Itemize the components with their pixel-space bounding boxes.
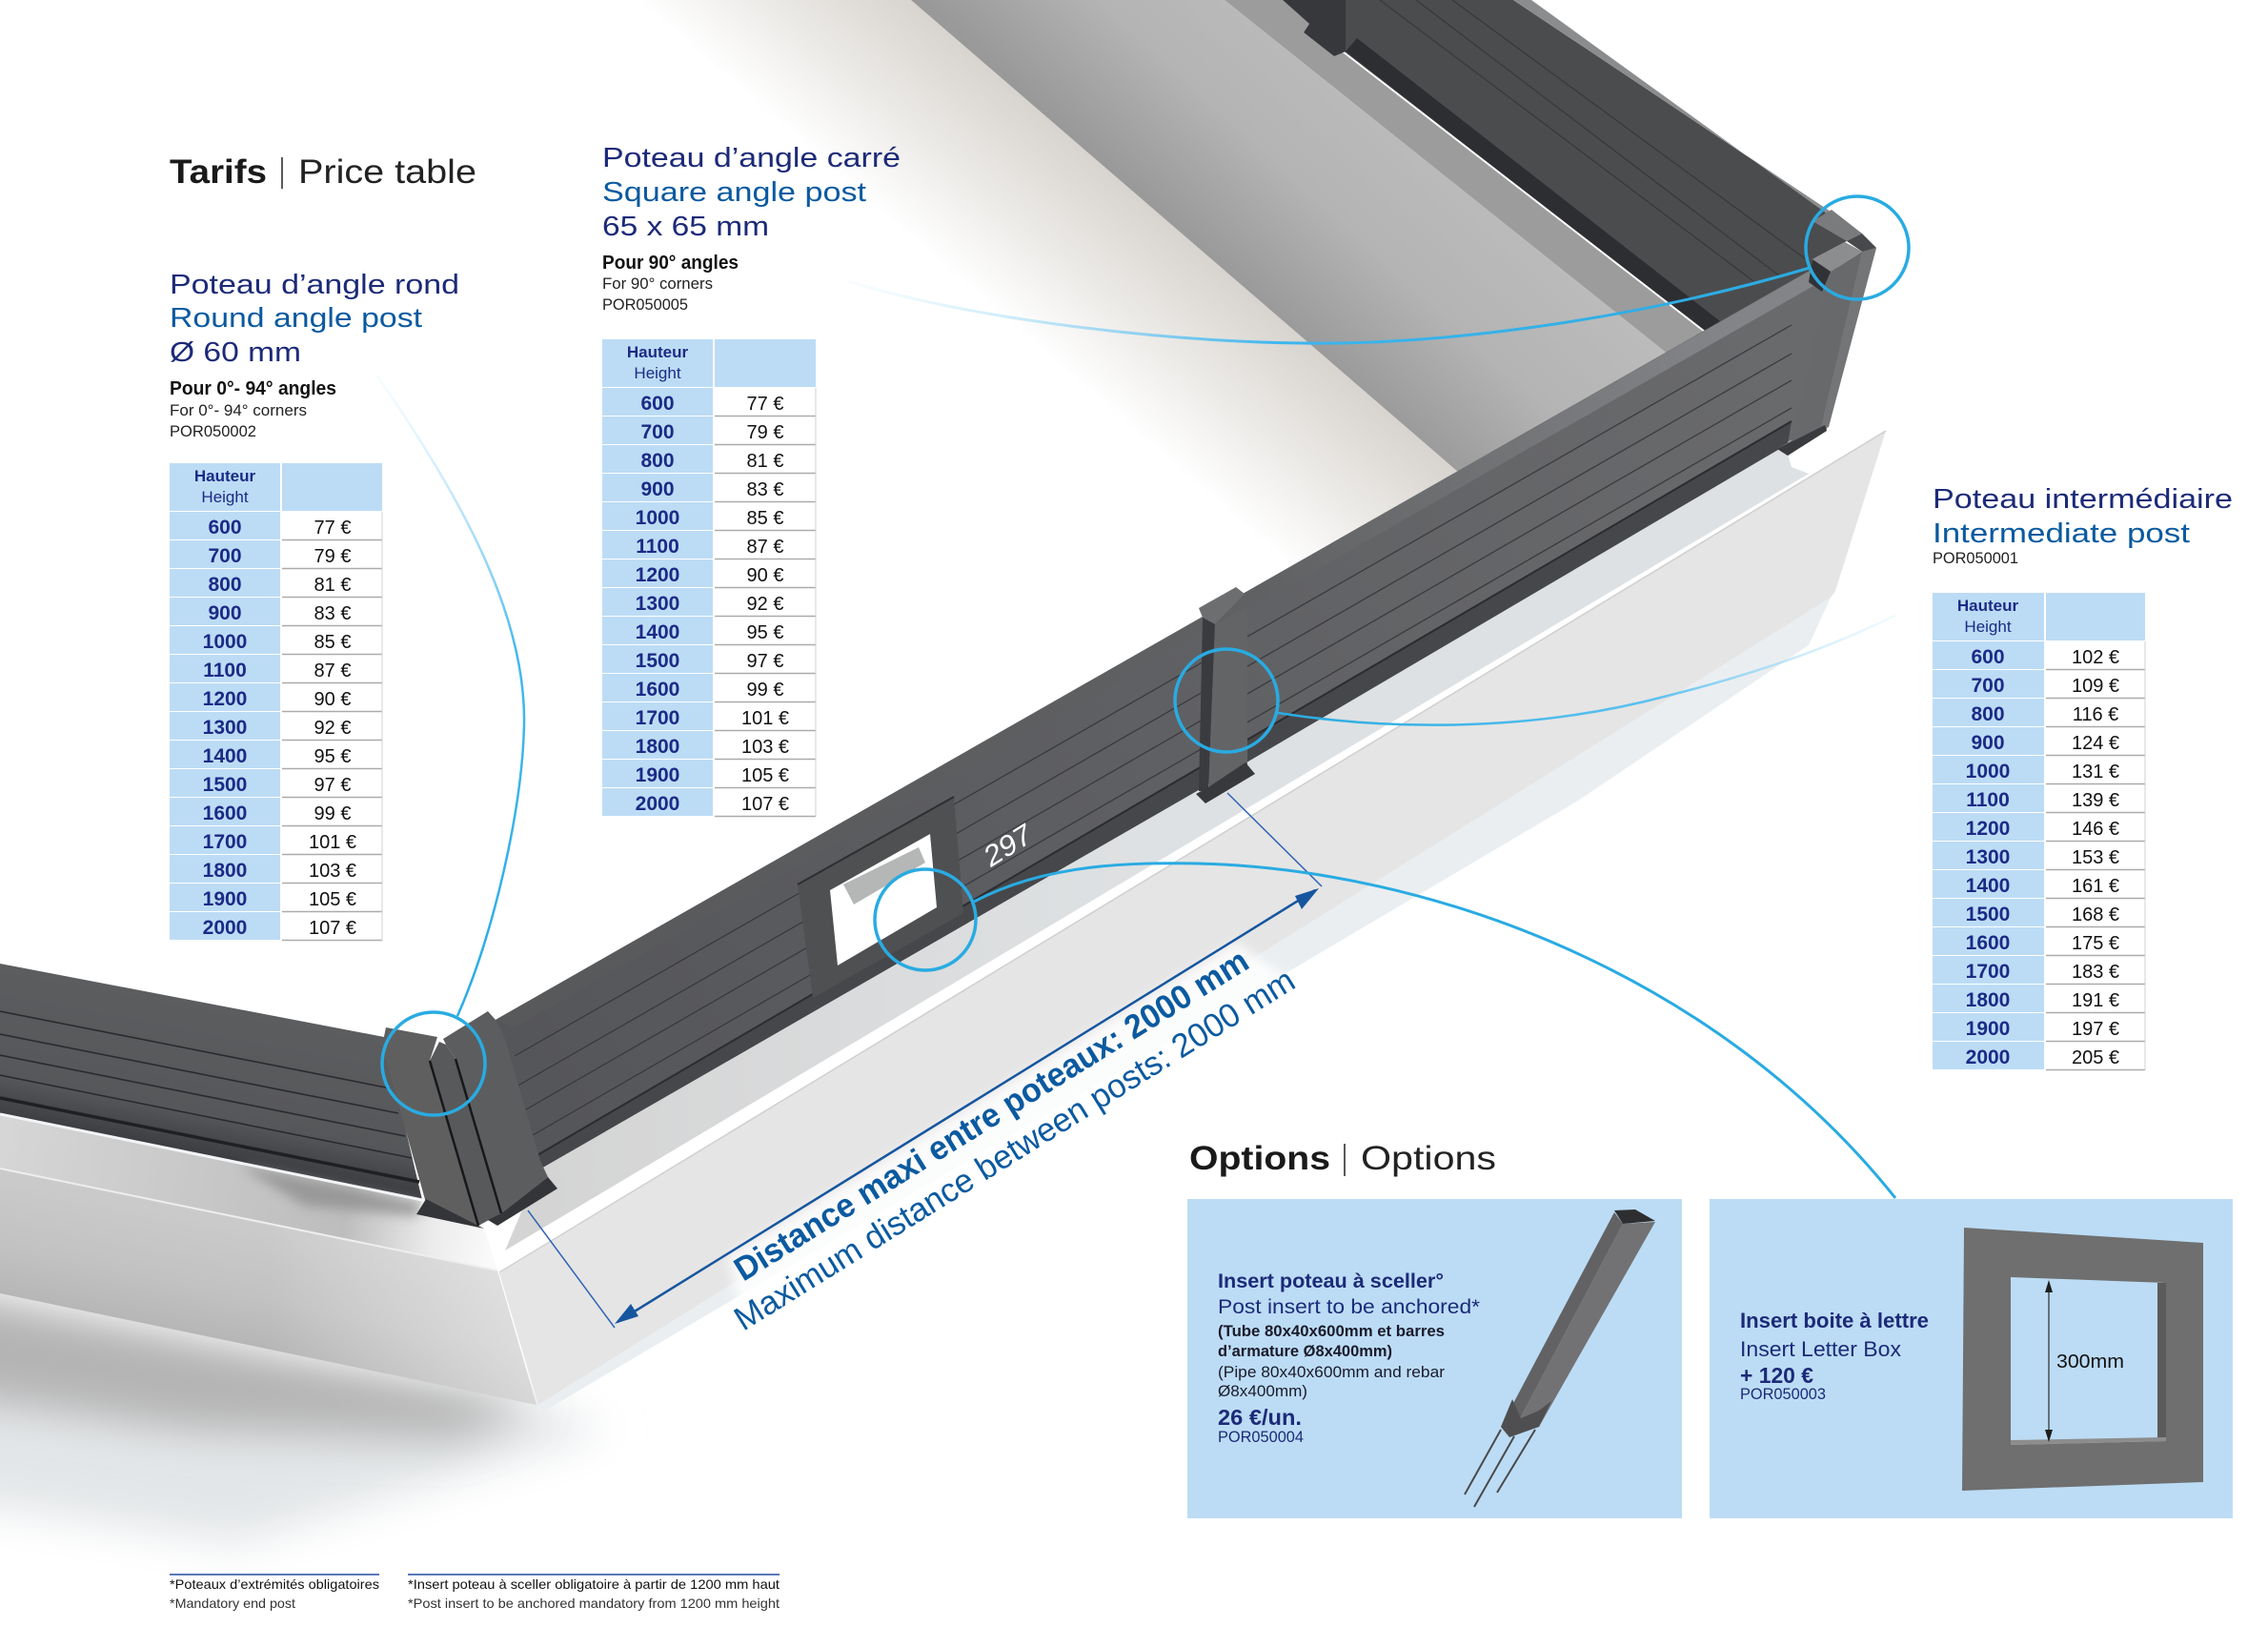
footnote: end post	[170, 1575, 379, 1611]
table: square angle post prices: 600	[640, 393, 675, 415]
dimension label: Maximum distance between posts: 2000 mm	[728, 962, 1302, 1338]
table: intermediate post prices: 197 €	[2072, 1019, 2119, 1040]
table: round angle post prices: 79 €	[314, 546, 351, 567]
table: round angle post prices: 77 €	[314, 518, 351, 539]
table: round angle post prices: 1300	[203, 717, 247, 739]
table: square angle post prices: 1100	[636, 536, 679, 558]
table: square angle post prices: 700	[640, 421, 675, 443]
panel: letter box insert option	[1710, 1199, 2233, 1518]
table: intermediate post prices: 191 €	[2072, 990, 2119, 1011]
table: round angle post prices: 900	[208, 602, 242, 624]
icon: letter box frame	[1962, 1228, 2203, 1491]
icon: anchored post insert	[1465, 1209, 1655, 1507]
table: square angle post prices: 900	[640, 478, 675, 500]
post insert text: Insert poteau à sceller°	[1218, 1270, 1444, 1292]
table header: Hauteur	[627, 343, 688, 361]
table: round angle post prices: 1700	[203, 831, 247, 853]
heading: Options | Options: Options	[1189, 1140, 1330, 1177]
post insert text: (Tube 80x40x600mm et barres	[1218, 1322, 1445, 1340]
table: round angle post prices: 1900	[203, 888, 247, 910]
table: intermediate post prices: 131 €	[2072, 762, 2119, 783]
table: square angle post prices: 1900	[636, 764, 679, 786]
table: round angle post prices: 92 €	[314, 718, 351, 739]
table: intermediate post prices: 168 €	[2072, 904, 2119, 925]
table: round angle post prices: 97 €	[314, 775, 351, 796]
table: round angle post prices: 87 €	[314, 661, 351, 681]
post insert text: Post insert to be anchored*	[1218, 1296, 1480, 1318]
table: square angle post prices: 83 €	[747, 479, 783, 500]
table: intermediate post prices: 161 €	[2072, 876, 2119, 897]
table: intermediate post prices: 102 €	[2072, 647, 2119, 668]
table: intermediate post prices: 116 €	[2073, 704, 2118, 725]
table: intermediate post prices: 205 €	[2072, 1047, 2119, 1068]
table: round angle post prices: 1100	[203, 660, 247, 681]
far post	[1283, 0, 1346, 56]
table: round angle post prices: 105 €	[309, 889, 356, 910]
table: square angle post prices: 1400	[636, 621, 679, 643]
heading: intermediate post: Poteau intermédiaire	[1933, 484, 2233, 515]
table: square angle post prices: 2000	[636, 793, 679, 815]
left wall	[0, 964, 422, 1200]
table: square angle post prices: 77 €	[747, 394, 783, 415]
table: square angle post prices: 101 €	[741, 708, 789, 729]
table: square angle post prices: 90 €	[747, 565, 783, 586]
heading: round angle post: Round angle post	[170, 303, 422, 334]
footnote: end post: *Poteaux d’extrémités obligatoires	[170, 1576, 379, 1592]
footnote: anchored insert: *Insert poteau à sceller obligatoire à partir de 1200 mm haut	[408, 1576, 780, 1592]
front wall	[496, 254, 1839, 1169]
table: square angle post prices: 1600	[636, 679, 679, 701]
table: square angle post prices: 95 €	[747, 622, 783, 643]
table: round angle post prices: 1800	[203, 860, 247, 882]
table header: Height	[634, 364, 681, 382]
heading: Options | Options	[1189, 1140, 1496, 1177]
table: square angle post prices: 1800	[636, 736, 679, 758]
table: intermediate post prices: 1300	[1966, 846, 2010, 868]
heading: square angle post: Square angle post	[602, 177, 866, 208]
table header: Height	[201, 488, 249, 506]
title: Tarifs | Price table	[170, 153, 476, 191]
table: intermediate post prices: 183 €	[2072, 962, 2119, 983]
heading: intermediate post: Intermediate post	[1933, 518, 2190, 549]
table: square angle post prices: 1000	[636, 507, 679, 529]
table: round angle post prices: 107 €	[309, 918, 356, 939]
letter box on wall	[798, 797, 963, 998]
heading: round angle post: Pour 0°- 94° angles	[170, 378, 336, 399]
heading: square angle post: Pour 90° angles	[602, 253, 739, 274]
table: round angle post prices: 85 €	[314, 632, 351, 653]
title: Tarifs | Price table: Tarifs	[170, 153, 267, 191]
post insert text: d’armature Ø8x400mm)	[1218, 1342, 1392, 1360]
table header: Hauteur	[1957, 597, 2018, 615]
scene: interior floor	[572, 0, 1705, 762]
letter box text: Insert boite à lettre	[1740, 1309, 1929, 1332]
heading: square angle post	[602, 143, 901, 314]
post insert text: 26 €/un.	[1218, 1405, 1302, 1430]
intermediate post	[1196, 587, 1255, 803]
table: intermediate post prices: 1200	[1966, 818, 2010, 840]
callout: intermediate post	[1175, 615, 1896, 752]
table: square angle post prices: 103 €	[741, 737, 789, 758]
table: square angle post prices: 87 €	[747, 537, 783, 558]
table: intermediate post prices: 139 €	[2072, 790, 2119, 811]
table: round angle post prices: 1200	[203, 688, 247, 710]
callout: square angle post	[848, 196, 1909, 343]
table: intermediate post prices: 900	[1971, 732, 2005, 754]
table: intermediate post prices: 600	[1971, 646, 2005, 668]
footnote: end post: *Mandatory end post	[170, 1596, 295, 1611]
heading: intermediate post: POR050001	[1933, 549, 2018, 567]
table: round angle post prices: 1400	[203, 745, 247, 767]
table: intermediate post prices: 1500	[1966, 904, 2010, 925]
table: square angle post prices: 99 €	[747, 680, 783, 701]
table: square angle post prices: 92 €	[747, 594, 783, 615]
shadow below plinth	[0, 1268, 610, 1544]
table: square angle post prices: 85 €	[747, 508, 783, 529]
heading: square angle post: For 90° corners	[602, 274, 713, 293]
dimension label: Distance maxi entre poteaux: 2000 mm	[728, 942, 1255, 1289]
heading: round angle post: Ø 60 mm	[170, 337, 301, 368]
house number 297: 297	[977, 819, 1040, 874]
table: round angle post prices: 101 €	[309, 832, 356, 853]
heading: square angle post: 65 x 65 mm	[602, 212, 769, 242]
table: intermediate post prices: 153 €	[2072, 847, 2119, 868]
post insert text	[1218, 1270, 1480, 1446]
post insert text: POR050004	[1218, 1428, 1304, 1446]
table: intermediate post prices: 109 €	[2072, 676, 2119, 697]
table: square angle post prices: 105 €	[741, 765, 789, 786]
table: intermediate post prices	[1933, 593, 2145, 1070]
table header	[1933, 593, 2145, 640]
left corner post	[382, 1011, 557, 1229]
table: round angle post prices: 700	[208, 545, 242, 567]
heading: Options | Options: Options	[1361, 1140, 1496, 1177]
table: square angle post prices: 1500	[636, 650, 679, 672]
table: round angle post prices: 103 €	[309, 861, 356, 882]
table header	[602, 339, 816, 387]
table: intermediate post prices: 124 €	[2072, 733, 2119, 754]
table: intermediate post prices: 1000	[1966, 761, 2010, 783]
table: square angle post prices: 107 €	[741, 794, 789, 815]
heading: square angle post: Poteau d’angle carré	[602, 143, 901, 173]
heading: round angle post: For 0°- 94° corners	[170, 401, 307, 419]
table header: Height	[1964, 618, 2012, 636]
table: round angle post prices: 1600	[203, 803, 247, 824]
letter box text: + 120 €	[1740, 1363, 1813, 1388]
heading: round angle post	[170, 270, 459, 440]
panel: post insert option	[1187, 1199, 1682, 1518]
table: intermediate post prices: 2000	[1966, 1047, 2010, 1068]
table: round angle post prices: 1000	[203, 631, 247, 653]
post insert text: (Pipe 80x40x600mm and rebar	[1218, 1363, 1445, 1381]
icon: letter box frame: 300mm	[2056, 1352, 2124, 1372]
table: round angle post prices: 800	[208, 574, 242, 596]
dimension arrow	[2045, 1280, 2053, 1442]
table: round angle post prices: 600	[208, 517, 242, 539]
table: intermediate post prices: 1600	[1966, 932, 2010, 954]
table: intermediate post prices: 175 €	[2072, 933, 2119, 954]
table: round angle post prices: 99 €	[314, 803, 351, 824]
plinth: right ledge	[499, 431, 1886, 1414]
table: round angle post prices: 95 €	[314, 746, 351, 767]
table: square angle post prices: 1700	[636, 707, 679, 729]
table: round angle post prices: 81 €	[314, 575, 351, 596]
footnote: anchored insert	[408, 1575, 780, 1611]
table header	[170, 463, 382, 511]
right corner post	[1777, 210, 1876, 456]
table: square angle post prices: 800	[640, 450, 675, 472]
table: round angle post prices: 90 €	[314, 689, 351, 710]
table: intermediate post prices: 700	[1971, 675, 2005, 697]
table: square angle post prices: 1200	[636, 564, 679, 586]
heading: round angle post: POR050002	[170, 422, 256, 440]
table: square angle post prices: 1300	[636, 593, 679, 615]
heading: round angle post: Poteau d’angle rond	[170, 270, 459, 300]
letter box text: Insert Letter Box	[1740, 1337, 1901, 1361]
table: intermediate post prices: 1100	[1966, 789, 2010, 811]
table: intermediate post prices: 1900	[1966, 1018, 2010, 1040]
heading: square angle post: POR050005	[602, 295, 688, 314]
callout: round angle post	[376, 375, 524, 1115]
title: Tarifs | Price table: Price table	[298, 153, 476, 191]
dimension: max distance between posts	[528, 793, 1322, 1338]
heading: intermediate post	[1933, 484, 2233, 567]
table: intermediate post prices: 1800	[1966, 989, 2010, 1011]
callout: letter box	[875, 864, 1895, 1198]
letter box text: POR050003	[1740, 1385, 1826, 1403]
table: intermediate post prices: 146 €	[2072, 819, 2119, 840]
table: round angle post prices: 1500	[203, 774, 247, 796]
table: round angle post prices: 83 €	[314, 603, 351, 624]
far wall	[1283, 0, 1862, 332]
table: intermediate post prices: 1700	[1966, 961, 2010, 983]
table: square angle post prices: 81 €	[747, 451, 783, 472]
plinth: left ledge and face	[0, 1114, 537, 1405]
table: square angle post prices: 79 €	[747, 422, 783, 443]
table: square angle post prices	[602, 339, 816, 817]
table header: Hauteur	[194, 467, 255, 485]
table: round angle post prices	[170, 463, 382, 941]
table: square angle post prices: 97 €	[747, 651, 783, 672]
post insert text: Ø8x400mm)	[1218, 1382, 1307, 1400]
table: intermediate post prices: 1400	[1966, 875, 2010, 897]
table: round angle post prices: 2000	[203, 917, 247, 939]
letter box text	[1740, 1309, 1929, 1403]
table: intermediate post prices: 800	[1971, 703, 2005, 725]
footnote: anchored insert: *Post insert to be anchored mandatory from 1200 mm height	[408, 1596, 780, 1611]
